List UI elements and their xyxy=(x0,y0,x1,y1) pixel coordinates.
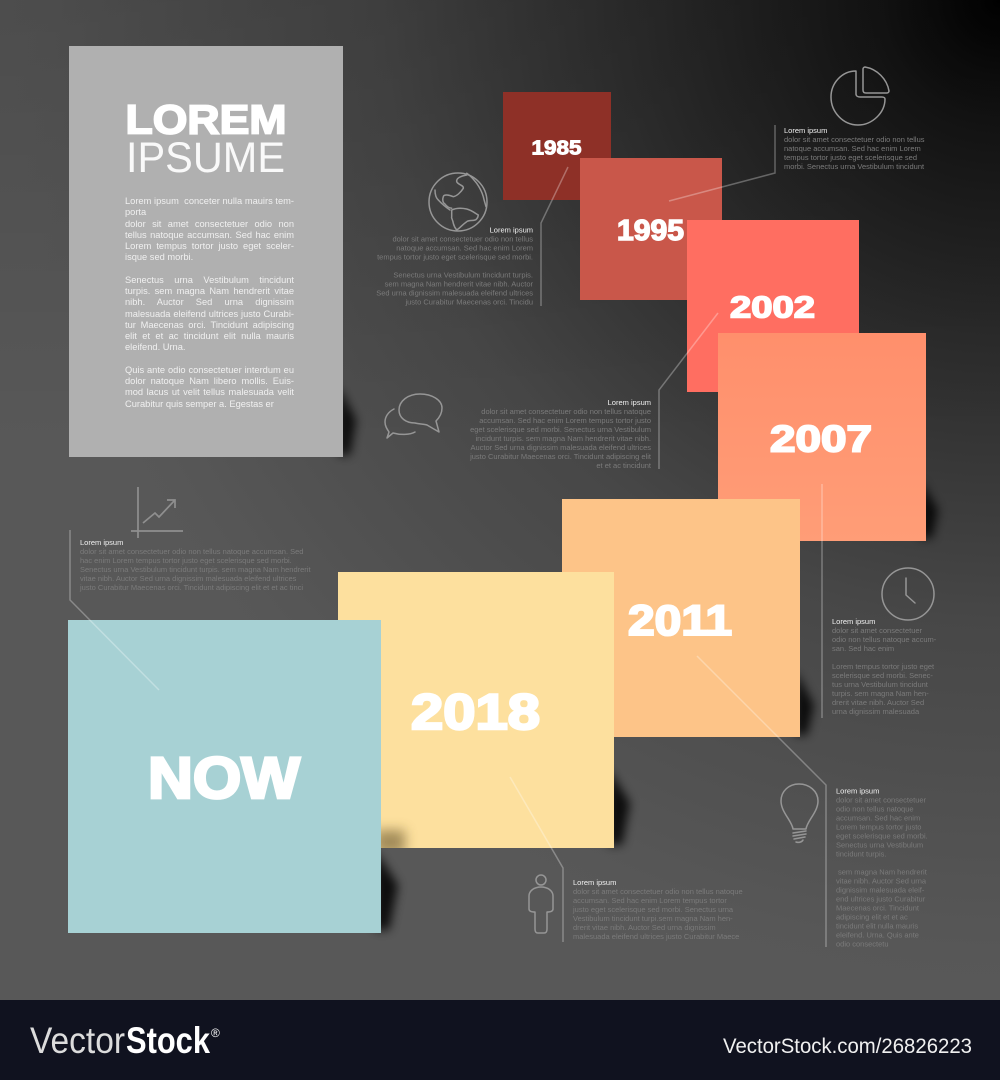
text block: 2002 xyxy=(469,398,652,470)
text block: 2007 xyxy=(832,617,937,716)
intro text xyxy=(125,196,294,409)
icon: pie chart xyxy=(831,67,889,125)
icon: light bulb xyxy=(781,784,818,842)
text block: 2002: et et ac tincidunt xyxy=(596,461,652,470)
text block: 2018: Vestibulum tincidunt turpi.sem magna Nam hen- xyxy=(573,914,733,923)
connector: 2011 xyxy=(697,656,826,947)
text block: 1985: Lorem ipsum xyxy=(490,226,533,234)
square: 1985 xyxy=(503,92,611,200)
text block: now xyxy=(79,538,311,592)
text block: 2011: Maecenas orci. Tincidunt xyxy=(836,904,920,912)
icon: clock xyxy=(882,568,934,620)
text block: 2011: Senectus urna Vestibulum xyxy=(836,840,923,850)
footer image id: VectorStock.com/26826223 xyxy=(723,1035,972,1058)
text block: 2018 xyxy=(572,878,743,941)
intro text: tellus natoque accumsan. Sed hac enim xyxy=(125,230,294,240)
text block: 2018: Lorem ipsum xyxy=(573,878,616,887)
text block: 2007: Lorem ipsum xyxy=(832,617,875,626)
text block: 2002: accumsan. Sed hac enim Lorem tempus tortor justo xyxy=(479,416,651,425)
text block: 2007: san. Sed hac enim xyxy=(832,644,894,653)
text block: 1995 xyxy=(784,126,925,171)
text block: 1985: sem magna Nam hendrerit vitae nibh. Auctor xyxy=(385,280,533,288)
text block: 2007: scelerisque sed morbi. Senec- xyxy=(832,671,933,680)
square: 2007 xyxy=(718,333,926,541)
text block: 2011: Lorem tempus tortor justo xyxy=(836,822,921,832)
text block: 2011: odio consectetu xyxy=(836,940,889,948)
text block: 1995: tempus tortor justo eget scelerisque sed xyxy=(784,153,917,162)
text block: 2018: accumsan. Sed hac enim Lorem tempus tortor xyxy=(573,896,727,905)
text block: 2018: malesuada eleifend ultrices justo Curabitur Maece xyxy=(573,932,739,941)
square: 2011: 2011 xyxy=(628,598,732,645)
title xyxy=(126,96,286,182)
text block: 2018: justo eget scelerisque sed morbi. Senectus urna xyxy=(572,905,734,914)
text block: 2018: dolor sit amet consectetuer odio non tellus natoque xyxy=(573,887,743,896)
square: 1995 xyxy=(580,158,722,300)
intro text: mod lacus ut velit tellus malesuada velit xyxy=(125,387,294,397)
text block: now: Senectus urna Vestibulum tincidunt turpis. sem magna Nam hendrerit xyxy=(80,565,311,574)
text block: 2011: eleifend. Urna. Quis ante xyxy=(836,930,919,940)
text block: 2011: sem magna Nam hendrerit xyxy=(838,868,928,876)
text block: 2018: drerit vitae nibh. Auctor Sed urna dignissim xyxy=(573,923,716,932)
intro text: elit et et ac tincidunt elit nulla mauris xyxy=(125,331,294,341)
text block: 2007: turpis. sem magna Nam hen- xyxy=(832,689,929,698)
intro text: nibh. Auctor Sed urna dignissim xyxy=(125,297,294,307)
text block: 2002: eget scelerisque sed morbi. Senectus urna Vestibulum xyxy=(470,425,651,434)
text block: 1995: dolor sit amet consectetuer odio non tellus xyxy=(784,135,925,144)
intro text: tur Maecenas orci. Tincidunt adipiscing xyxy=(125,320,294,330)
square: 2002: 2002 xyxy=(730,290,815,324)
text block: 2007: drerit vitae nibh. Auctor Sed xyxy=(832,698,924,707)
text block: 2011: adipiscing elit et et ac xyxy=(836,912,908,922)
text block: 2011: end ultrices justo Curabitur xyxy=(836,894,926,904)
square: now: NOW xyxy=(148,746,300,811)
intro text: Lorem ipsum conceter nulla mauirs tem- xyxy=(125,196,294,206)
text block: 2007: tus urna Vestibulum tincidunt xyxy=(832,680,929,689)
text block: 2011: dolor sit amet consectetuer xyxy=(836,796,927,804)
text block: 2011: eget scelerisque sed morbi. xyxy=(836,832,928,840)
square: 2018 xyxy=(338,572,614,848)
square: 1985: 1985 xyxy=(532,136,582,160)
footer logo xyxy=(30,1020,220,1061)
connector: 1995 xyxy=(669,125,775,201)
icon: globe xyxy=(429,173,487,231)
text block: 1985: Sed urna dignissim malesuada eleifend ultrices xyxy=(376,288,533,298)
text block: 1985 xyxy=(376,226,533,306)
square: 2011 xyxy=(562,499,800,737)
shadow on 2018 square xyxy=(375,830,405,854)
text block: now: Lorem ipsum xyxy=(80,538,123,547)
text block: 1985: tempus tortor justo eget scelerisque sed morbi. xyxy=(377,252,533,262)
square: now xyxy=(68,620,381,933)
intro text: Curabitur quis semper a. Egestas er xyxy=(125,398,274,408)
text block: 2007: Lorem tempus tortor justo eget xyxy=(832,662,935,671)
icon: person xyxy=(529,875,553,933)
intro text: dolor natoque Nam libero mollis. Euis- xyxy=(125,376,294,386)
text block: 1995: morbi. Senectus urna Vestibulum tincidunt xyxy=(784,162,925,171)
text block: 2011: tincidunt elit nulla mauris xyxy=(836,922,918,930)
intro text: turpis. sem magna Nam hendrerit vitae xyxy=(125,286,294,296)
text block: 2011: tincidunt turpis. xyxy=(836,850,886,858)
connector: 2002 xyxy=(659,313,718,469)
text block: 2011: Lorem ipsum xyxy=(836,786,879,796)
footer logo: Vector xyxy=(30,1020,125,1061)
intro text: Senectus urna Vestibulum tincidunt xyxy=(125,275,294,285)
text block: 1995: Lorem ipsum xyxy=(784,126,827,135)
icon: speech bubbles xyxy=(385,394,442,438)
text block: 2007: dolor sit amet consectetuer xyxy=(832,626,923,635)
text block: 2007: urna dignissim malesuada xyxy=(832,707,920,716)
text block: 2002: justo Curabitur Maecenas orci. Tincidunt adipiscing elit xyxy=(469,452,652,461)
square: 2007: 2007 xyxy=(770,418,872,460)
intro text: porta xyxy=(125,207,146,217)
text block: 2002: dolor sit amet consectetuer odio non tellus natoque xyxy=(481,407,651,416)
text block: 2002: Lorem ipsum xyxy=(608,398,651,407)
connector: 2007 xyxy=(821,484,823,718)
text block: 2011: accumsan. Sed hac enim xyxy=(836,814,920,822)
square: 1995: 1995 xyxy=(617,215,684,247)
curl shadows xyxy=(338,385,938,930)
connector: 2018 xyxy=(510,777,563,942)
intro text: dolor sit amet consectetuer odio non xyxy=(125,218,294,228)
text block: now: vitae nibh. Auctor Sed urna dignissim malesuada eleifend ultrices xyxy=(80,574,297,583)
connector: 1985 xyxy=(541,167,568,306)
title: LOREM xyxy=(126,96,286,142)
title: IPSUME xyxy=(126,134,285,182)
text block: 2011: dignissim malesuada eleif- xyxy=(836,886,925,894)
text block: now: justo Curabitur Maecenas orci. Tincidunt adipiscing elit et et ac tinci xyxy=(79,583,303,592)
text block: 1985: Senectus urna Vestibulum tincidunt turpis. xyxy=(393,270,533,280)
text block: 1985: natoque accumsan. Sed hac enim Lorem xyxy=(396,244,533,252)
intro text: isque sed morbi. xyxy=(125,252,193,262)
text block: 1995: natoque accumsan. Sed hac enim Lorem xyxy=(784,144,921,153)
text block: 2007: odio non tellus natoque accum- xyxy=(832,635,937,644)
text block: 2011: odio non tellus natoque xyxy=(836,804,914,814)
text block: 2002: Auctor Sed urna dignissim malesuada eleifend ultrices xyxy=(470,443,651,452)
text block: 2011 xyxy=(836,786,928,948)
square: 2002 xyxy=(687,220,859,392)
text block: 2002: incidunt turpis. sem magna Nam hendrerit vitae nibh. xyxy=(475,434,651,443)
footer logo: Stock xyxy=(126,1020,210,1061)
text block: now: hac enim Lorem tempus tortor justo eget scelerisque sed morbi. xyxy=(80,556,292,565)
intro text: Quis ante odio consectetuer interdum eu xyxy=(125,365,294,375)
footer bar xyxy=(0,1000,1000,1080)
footer logo: ® xyxy=(211,1026,220,1040)
intro text: eleifend. Urna. xyxy=(125,342,185,352)
intro text: malesuada eleifend ultrices justo Curabi- xyxy=(125,308,294,318)
intro panel xyxy=(69,46,343,457)
square: 2018: 2018 xyxy=(411,683,540,740)
connector: now xyxy=(70,530,159,690)
text block: 2011: vitae nibh. Auctor Sed urna xyxy=(836,876,927,886)
icon: line chart xyxy=(131,487,183,538)
text block: 1985: dolor sit amet consectetuer odio non tellus xyxy=(392,234,533,244)
text block: now: dolor sit amet consectetuer odio non tellus natoque accumsan. Sed xyxy=(80,547,303,556)
text block: 1985: justo Curabitur Maecenas orci. Tincidu xyxy=(404,298,533,306)
intro text: Lorem tempus tortor justo eget sceler- xyxy=(125,241,294,251)
